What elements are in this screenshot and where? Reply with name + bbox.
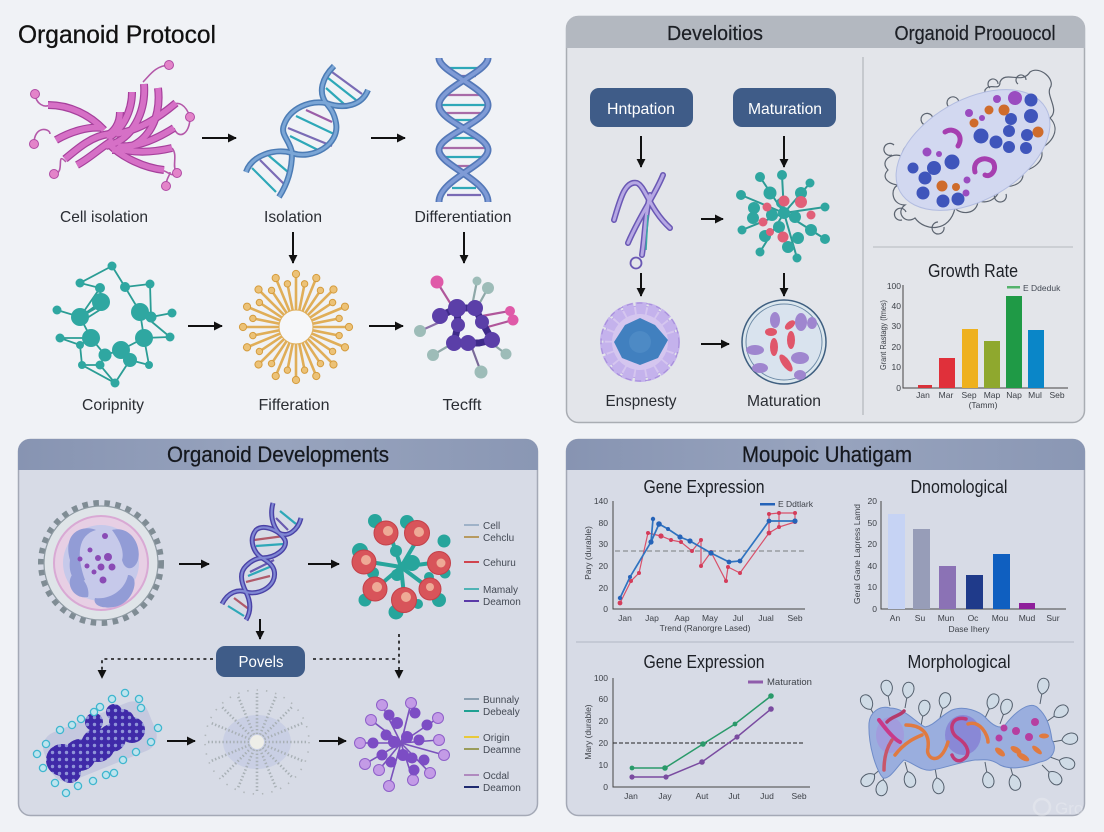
heading: Organoid Developments: [167, 442, 389, 467]
line chart: gene expression maturation: 100: [594, 673, 608, 683]
line chart: gene expression: 140: [594, 496, 608, 506]
line chart: gene expression: 80: [599, 518, 608, 528]
legend: lower: [464, 695, 521, 794]
panel header: [18, 439, 538, 470]
icon: golden sunburst micelle: [239, 270, 353, 384]
label: Coripnity: [82, 397, 144, 414]
chart title: Gene Expression: [644, 652, 764, 672]
bar chart: dnomological: 20: [868, 539, 877, 549]
chart title: Dnomological: [910, 477, 1008, 497]
chart title: Growth Rate: [928, 261, 1018, 281]
line chart: gene expression: Pary (durable): [583, 526, 593, 580]
panel header: [566, 439, 1085, 470]
chart: growth rate bars: Grant Rastagy (fmes): [878, 300, 888, 370]
line chart: gene expression maturation: Jan: [624, 791, 638, 801]
line chart: gene expression: 20: [599, 561, 608, 571]
icon: grey radial burst: [205, 690, 309, 794]
legend: upper: Mamaly: [483, 585, 518, 596]
chart: growth rate bars: Seb: [1049, 390, 1065, 400]
icon: diagonal DNA helix: [246, 66, 368, 197]
line chart: gene expression maturation: 60: [599, 694, 608, 704]
icon: pink protein ribbon: [30, 60, 194, 190]
line chart: gene expression: Trend (Ranorgre Lased): [660, 623, 751, 633]
arrow: [292, 232, 294, 263]
icon: teal and red molecule: [736, 170, 830, 262]
line chart: gene expression maturation: [583, 652, 812, 801]
icon: maturation dish: [742, 300, 826, 384]
legend: upper: Cehuru: [483, 558, 516, 569]
line chart: gene expression: 30: [599, 539, 608, 549]
line chart: gene expression maturation: 20: [599, 716, 608, 726]
panel: developments and organoid protocol: [566, 16, 1085, 422]
dashed arrow right: [313, 634, 399, 678]
chart: growth rate bars: 10: [892, 362, 901, 372]
arrow: [369, 325, 403, 327]
arrow: [640, 136, 642, 167]
line chart: gene expression: Aap: [674, 613, 690, 623]
bar chart: dnomological: 0: [872, 604, 877, 614]
illustration: organoid cell cluster: [875, 65, 1071, 235]
arrow: [701, 343, 729, 345]
legend: lower: Origin: [483, 733, 510, 744]
label: Isolation: [264, 209, 322, 226]
line chart: gene expression maturation: 20: [599, 738, 608, 748]
line chart: gene expression maturation: Seb: [791, 791, 807, 801]
arrow: [308, 563, 339, 565]
arrow: [783, 136, 785, 167]
button: Hntpation: Hntpation: [607, 101, 675, 118]
label: Cell isolation: [60, 209, 148, 226]
chart: growth rate bars: 100: [887, 281, 901, 291]
arrow: [259, 619, 261, 639]
line chart: gene expression: May: [702, 613, 719, 623]
arrow: [701, 218, 723, 220]
legend: upper: Cehclu: [483, 533, 514, 544]
bar chart: dnomological: An: [890, 613, 900, 623]
heading: Organoid Proouocol: [894, 23, 1056, 45]
icon: DNA helix: [222, 503, 301, 620]
chart: growth rate bars: (Tamm): [969, 400, 998, 410]
line chart: gene expression maturation: Mary (durable): [583, 704, 593, 760]
bar chart: dnomological: [852, 477, 1066, 634]
button: Hntpation: [590, 88, 693, 127]
icon: blue cell with purple membrane: [601, 303, 679, 381]
icon: teal ring molecule: [52, 262, 176, 388]
line chart: gene expression maturation: Aut: [696, 791, 709, 801]
watermark: [1034, 799, 1083, 818]
legend: upper: Deamon: [483, 597, 521, 608]
line chart: gene expression: Jual: [758, 613, 774, 623]
line chart: gene expression: Jap: [645, 613, 659, 623]
icon: purple molecule cluster: [354, 698, 450, 792]
watermark: Gro: [1055, 799, 1083, 818]
bar chart: dnomological: 50: [868, 518, 877, 528]
legend: upper: Cell: [483, 521, 500, 532]
chart: growth rate bars: 30: [892, 321, 901, 331]
chart: growth rate bars: [878, 261, 1068, 410]
bar chart: dnomological: Mud: [1019, 613, 1036, 623]
arrow: [463, 232, 465, 263]
line chart: gene expression: Jan: [618, 613, 632, 623]
bar chart: dnomological: 20: [868, 496, 877, 506]
chart title: Morphological: [908, 652, 1010, 672]
heading: Moupoic Uhatigam: [742, 442, 912, 467]
bar chart: dnomological: Mou: [992, 613, 1009, 623]
bar chart: dnomological: Dase Ihery: [948, 624, 990, 634]
icon: toothed cell: [41, 503, 161, 623]
label: Tecfft: [442, 397, 482, 414]
arrow: [202, 137, 236, 139]
bar chart: dnomological: Oc: [968, 613, 979, 623]
bar chart: dnomological: Su: [915, 613, 925, 623]
label: Maturation: [747, 393, 821, 410]
button: Povels: Povels: [238, 654, 284, 671]
button: Maturation: Maturation: [748, 101, 822, 118]
legend: lower: Ocdal: [483, 771, 509, 782]
button: Maturation: [733, 88, 836, 127]
line chart: gene expression: Jul: [733, 613, 744, 623]
arrow: [167, 740, 195, 742]
line chart: gene expression maturation: Jut: [728, 791, 740, 801]
arrow: [783, 273, 785, 296]
label: Differentiation: [414, 209, 512, 226]
line chart: gene expression maturation: Jay: [658, 791, 672, 801]
heading: Develoitios: [667, 23, 763, 45]
legend: lower: Deamne: [483, 745, 521, 756]
chart: growth rate bars: E Ddeduk: [1023, 283, 1061, 293]
legend: lower: Deamon: [483, 783, 521, 794]
title: Organoid Protocol: [18, 21, 216, 49]
chart: growth rate bars: Mul: [1028, 390, 1042, 400]
illustration: morphological tissue: [858, 652, 1079, 797]
line chart: gene expression maturation: 0: [603, 782, 608, 792]
chart: growth rate bars: Jan: [916, 390, 930, 400]
line chart: gene expression: 20: [599, 583, 608, 593]
chart: growth rate bars: 20: [892, 342, 901, 352]
bar chart: dnomological: Sur: [1046, 613, 1060, 623]
legend: upper: [464, 521, 521, 608]
arrow: [319, 740, 346, 742]
line chart: gene expression: [583, 477, 814, 633]
line chart: gene expression: 0: [603, 604, 608, 614]
arrow: [371, 137, 405, 139]
chart: growth rate bars: Sep: [961, 390, 977, 400]
icon: purple tissue cell: [33, 689, 162, 797]
line chart: gene expression maturation: Jud: [760, 791, 774, 801]
bar chart: dnomological: 40: [868, 561, 877, 571]
line chart: gene expression maturation: 10: [599, 760, 608, 770]
chart: growth rate bars: Nap: [1006, 390, 1022, 400]
dashed arrow left: [102, 659, 213, 678]
chart: growth rate bars: 40: [892, 301, 901, 311]
panel: moupoic uhatigam charts: [566, 439, 1085, 818]
panel header: [566, 16, 1085, 48]
panel: organoid protocol flow: [30, 58, 518, 414]
label: Enspnesty: [606, 393, 676, 410]
panel: organoid developments: [18, 439, 538, 816]
line chart: gene expression: E Ddtlark: [778, 499, 814, 509]
button: Povels: [216, 646, 305, 677]
bar chart: dnomological: Mun: [938, 613, 955, 623]
bar chart: dnomological: 10: [868, 582, 877, 592]
line chart: gene expression maturation: Maturation: [767, 677, 812, 688]
icon: purple chromosome: [614, 175, 670, 268]
chart: growth rate bars: Map: [984, 390, 1001, 400]
bar chart: dnomological: Geral Gane Lapress Lamd: [852, 504, 862, 604]
label: Fifferation: [258, 397, 330, 414]
icon: purple molecule: [414, 276, 518, 378]
arrow: [179, 563, 209, 565]
icon: vertical DNA helix: [439, 58, 488, 202]
arrow: [188, 325, 222, 327]
line chart: gene expression: Seb: [787, 613, 803, 623]
icon: red and teal cluster: [352, 514, 450, 620]
chart title: Gene Expression: [644, 477, 764, 497]
chart: growth rate bars: 0: [896, 383, 901, 393]
chart: growth rate bars: Mar: [939, 390, 953, 400]
legend: lower: Bunnaly: [483, 695, 519, 706]
legend: lower: Debealy: [483, 707, 520, 718]
arrow: [640, 273, 642, 296]
